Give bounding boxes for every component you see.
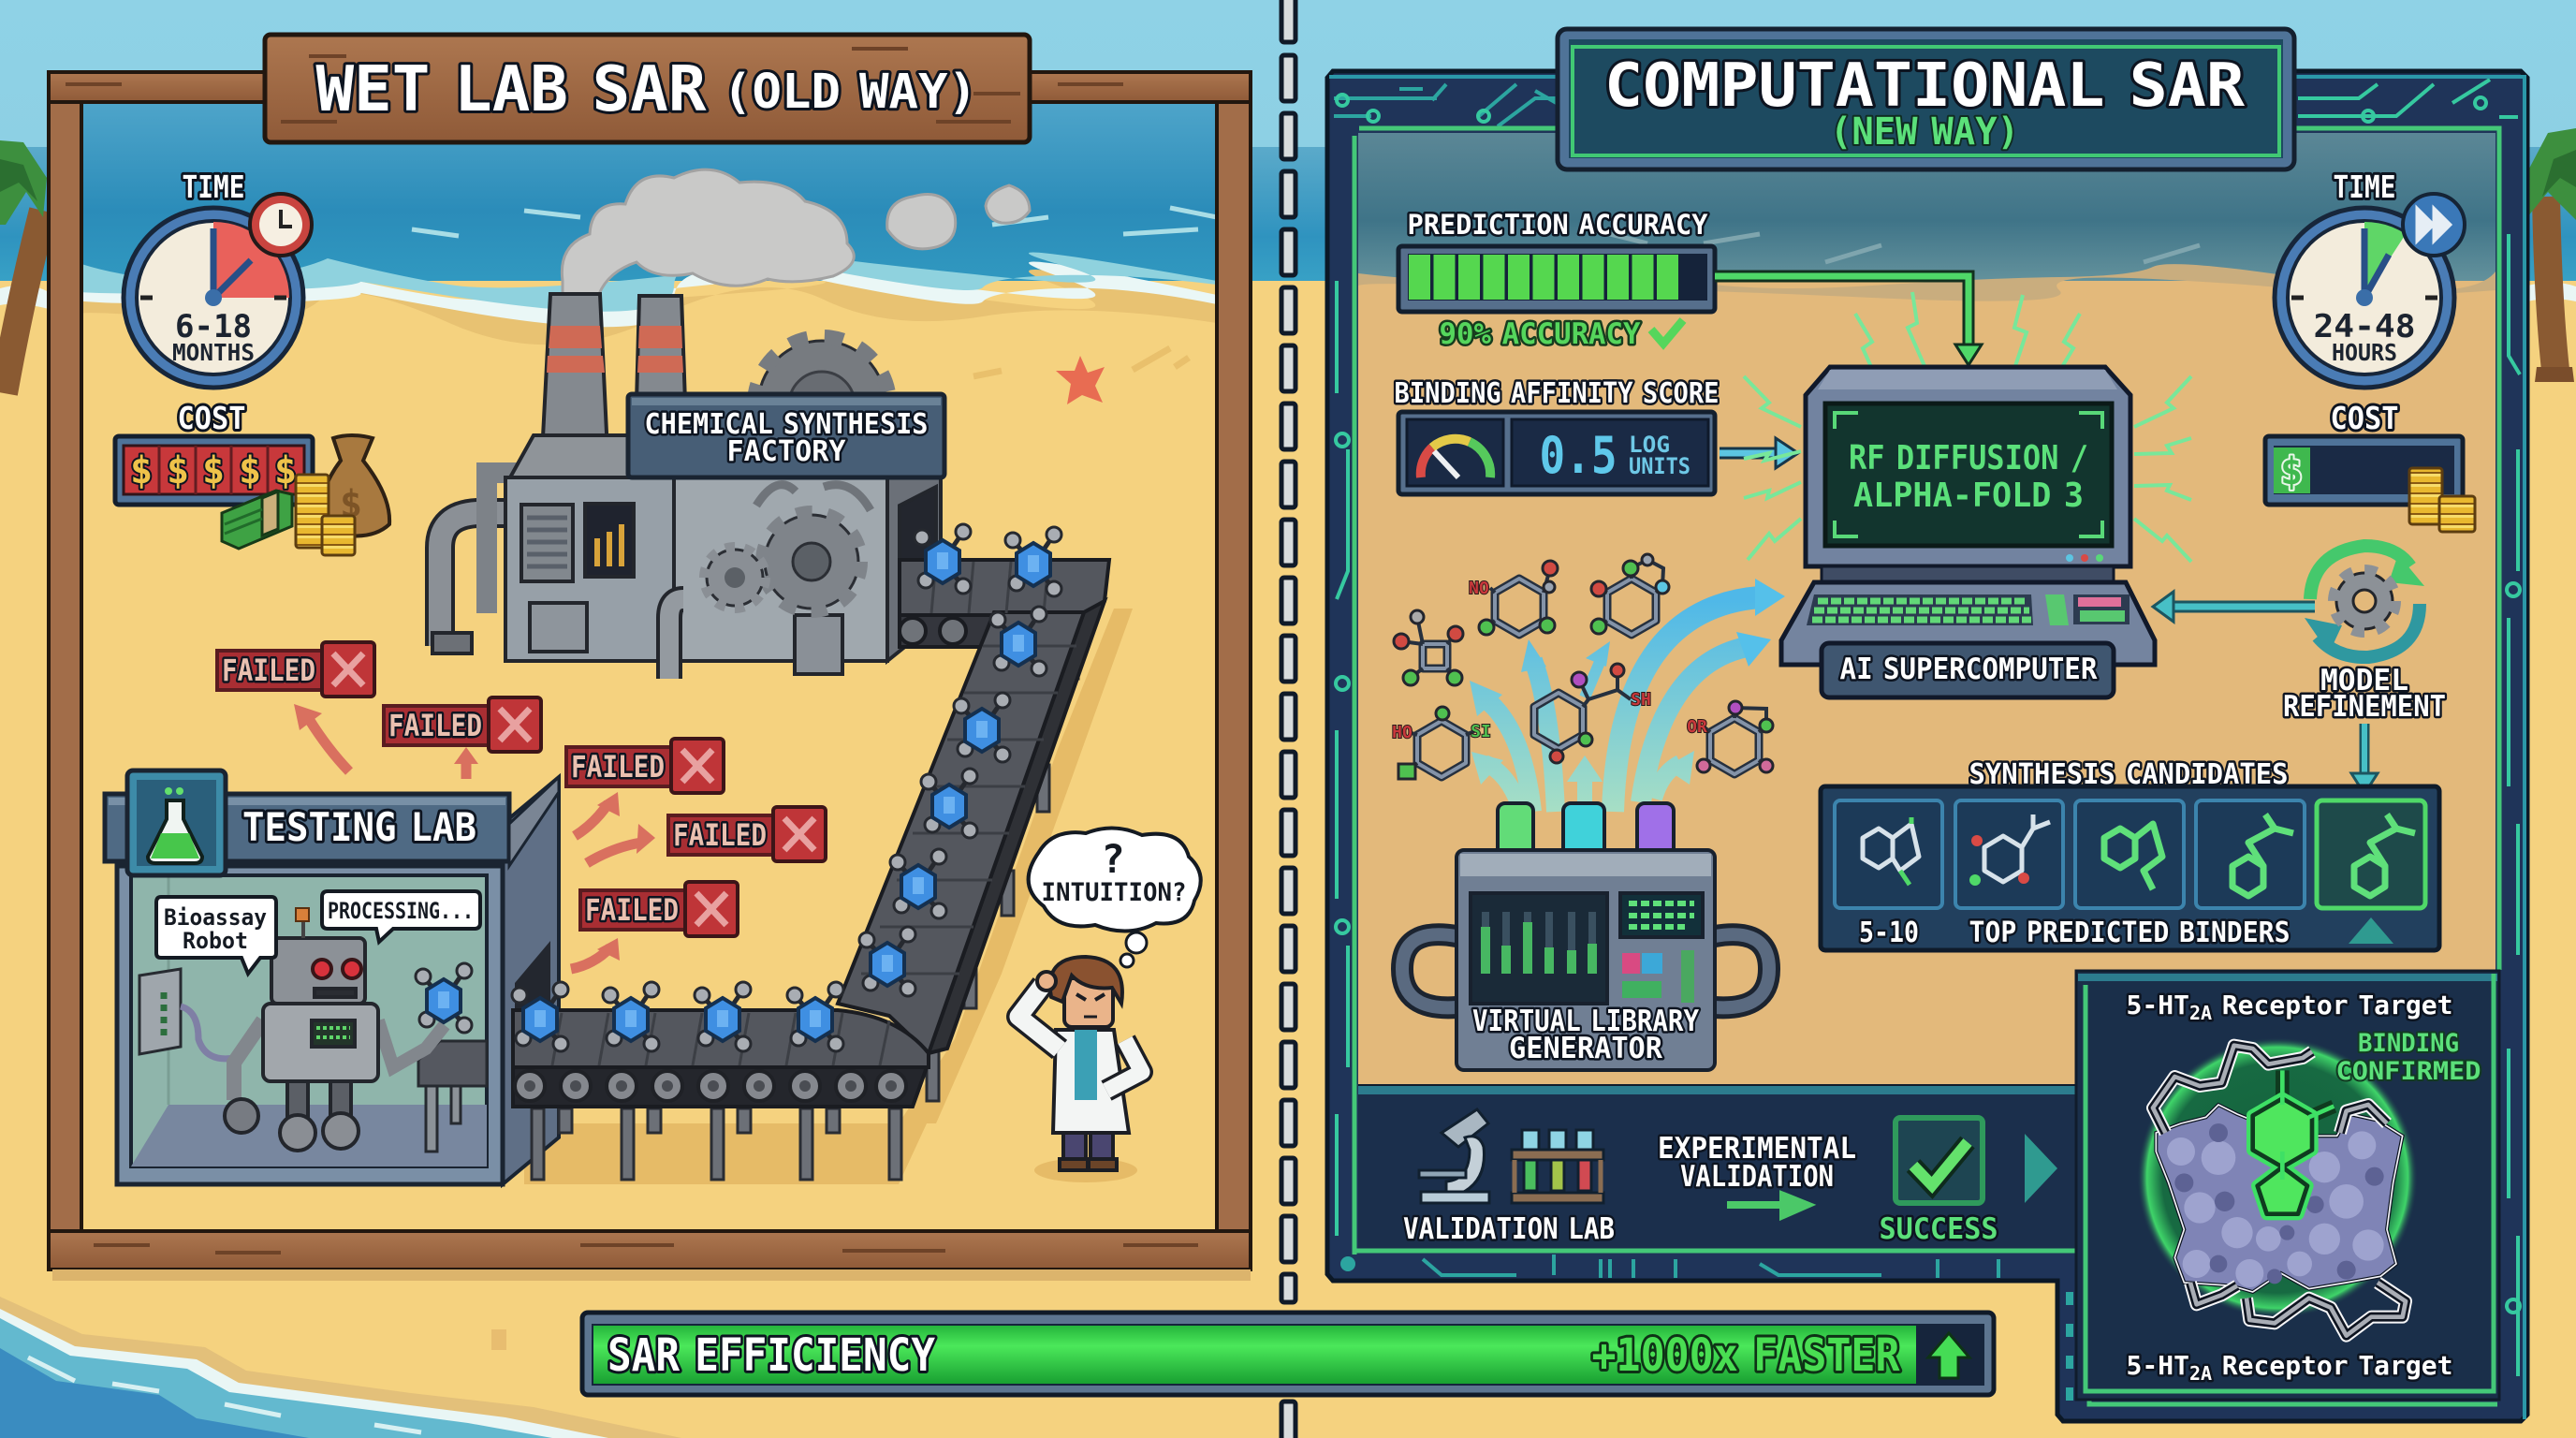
failed test arrows <box>309 719 641 969</box>
progress bar: sar efficiency <box>582 1313 1994 1395</box>
icon: microscope <box>1419 1109 1489 1203</box>
ribbons <box>2153 1046 2406 1336</box>
panel: synthesis candidates: SYNTHESIS CANDIDATES <box>1969 758 2288 791</box>
label: testing lab sign: TESTING LAB <box>242 804 476 850</box>
binding affinity meter <box>1395 377 1719 494</box>
label: chemical synthesis factory: FACTORY <box>726 435 846 468</box>
icon: virtual library generator <box>1402 803 1769 1070</box>
thought bubble: intuition: INTUITION? <box>1041 878 1187 907</box>
icon: green flask <box>148 787 202 863</box>
protein group <box>2153 1046 2406 1336</box>
clock: time 6-18 months: 6-18 <box>175 308 252 345</box>
panel: experimental validation bar: SUCCESS <box>1880 1212 1998 1246</box>
arrows: virtual library to computer <box>1470 579 1785 812</box>
label: ai supercomputer: AI SUPERCOMPUTER <box>1840 653 2098 686</box>
heading: wet lab sar (old way): (OLD WAY) <box>723 65 977 120</box>
arrow: validation <box>1727 1196 1807 1215</box>
icon: candidate molecules <box>1863 814 2415 896</box>
icon: starfish <box>1056 356 1105 404</box>
panel: receptor target: Receptor Target <box>2212 1350 2452 1381</box>
panel: receptor target: 5-HT <box>2127 1350 2189 1381</box>
icon: factory chimneys <box>541 294 685 487</box>
conveyor belt <box>513 560 1109 1180</box>
panel: synthesis candidates: TOP PREDICTED BINDERS <box>1969 917 2290 949</box>
floating skeletal molecules: NO <box>1469 579 1489 598</box>
panel: receptor target: 5-HT <box>2127 990 2189 1020</box>
icon: cash stack <box>222 491 292 549</box>
tag: failed 2: FAILED <box>388 708 482 743</box>
accuracy meter <box>1398 209 1715 351</box>
factory building <box>432 435 941 674</box>
panel: synthesis candidates: 5-10 <box>1859 917 1919 949</box>
panel interior: tinted beach <box>1358 133 2496 1095</box>
label: testing lab sign <box>105 770 559 875</box>
speech bubble: processing <box>322 891 480 942</box>
molecules on conveyor <box>512 524 1061 1051</box>
icon: virtual library generator: VIRTUAL LIBRARY <box>1472 1005 1699 1038</box>
cost meter: new way: $ <box>2280 450 2303 493</box>
cost meter: old way: $ <box>202 449 225 492</box>
arrow: binding affinity to computer <box>1720 438 1798 468</box>
legs <box>532 637 1078 1180</box>
floating skeletal molecules: SI <box>1471 722 1491 741</box>
rollers <box>515 1071 906 1101</box>
speech bubble: bioassay robot <box>156 897 276 974</box>
heading: wet lab sar (old way) <box>265 35 1030 142</box>
icon: coin stacks <box>2409 468 2475 532</box>
smoke clouds <box>562 169 1030 294</box>
icon: wall outlet <box>139 969 234 1059</box>
icon: success check <box>1895 1118 1983 1203</box>
heading: computational sar (new way): (NEW WAY) <box>1830 110 2019 154</box>
arrow: refinement to computer <box>2153 592 2315 622</box>
table <box>418 1041 487 1152</box>
icon: money bag <box>323 435 389 536</box>
icon: ai supercomputer: ALPHA-FOLD 3 <box>1853 477 2084 515</box>
panel: experimental validation bar: VALIDATION <box>1680 1160 1834 1194</box>
icon: right palm tree <box>2527 128 2576 382</box>
accuracy meter: 90% ACCURACY <box>1440 317 1641 351</box>
icon: confused scientist <box>1018 957 1142 1182</box>
binding affinity meter: BINDING AFFINITY SCORE <box>1395 377 1719 410</box>
label: ai supercomputer <box>1822 643 2114 697</box>
icon: bioassay robot <box>225 908 445 1151</box>
floating skeletal molecules: OR <box>1687 717 1707 737</box>
accuracy meter: PREDICTION ACCURACY <box>1408 209 1708 241</box>
tag: failed 1: FAILED <box>222 653 315 688</box>
testing lab room <box>105 770 559 1184</box>
clock: time 6-18 months: MONTHS <box>172 339 255 366</box>
panel: receptor target: 2A <box>2189 1002 2212 1024</box>
upper belt section <box>513 560 1109 1107</box>
icon: gauge <box>1421 439 1490 477</box>
label: model refinement <box>2283 664 2446 724</box>
panel: experimental validation bar: VALIDATION LAB <box>1403 1212 1615 1246</box>
cost meter: old way: $ <box>274 449 297 492</box>
wood frame <box>49 72 1251 1269</box>
cost meter: new way <box>2265 400 2475 532</box>
icon: virtual library generator: GENERATOR <box>1509 1032 1662 1065</box>
panel: computational sar (new way) <box>1327 29 2527 1421</box>
beach interior of wood frame <box>59 100 1217 1232</box>
clock: time 24-48 hours: TIME <box>2333 169 2396 205</box>
panel: receptor target: 2A <box>2189 1362 2212 1385</box>
clock: time 24-48 hours: 24-48 <box>2314 308 2415 345</box>
cost meter: new way: COST <box>2331 400 2398 436</box>
icon: left palm tree <box>0 140 47 393</box>
floating skeletal molecules: HO <box>1392 723 1412 742</box>
icon: model refinement cycle <box>2305 546 2424 657</box>
circuit traces <box>1334 80 2520 1376</box>
tag: failed 5 <box>580 882 738 936</box>
clock: time 24-48 hours: HOURS <box>2332 339 2397 366</box>
arrow: accuracy to computer <box>1715 276 1982 365</box>
circuit frame outer <box>1327 71 2527 1421</box>
icon: coin stacks <box>296 475 355 555</box>
panel: synthesis candidates <box>1821 758 2439 950</box>
icon: fast-forward badge <box>2403 194 2465 256</box>
speech bubble: processing: PROCESSING... <box>328 898 474 924</box>
speech bubble: bioassay robot: Robot <box>183 928 248 954</box>
icon: ai supercomputer <box>1781 367 2155 697</box>
tag: failed 1 <box>217 642 374 697</box>
tag: failed 4: FAILED <box>673 817 767 853</box>
icon: conveyor shadow on sand <box>524 609 1133 1184</box>
center dashed divider <box>1281 0 1295 1438</box>
panel: receptor target: Receptor Target <box>2212 990 2452 1020</box>
icon: up arrow <box>1928 1333 1969 1378</box>
floating skeletal molecules <box>1392 554 1773 779</box>
arrow: refinement to candidates <box>2351 724 2378 794</box>
label: chemical synthesis factory <box>628 394 944 477</box>
cost meter: old way: $ <box>130 449 153 492</box>
heading: computational sar (new way): COMPUTATIONAL SAR <box>1604 51 2245 121</box>
energy bolts around computer <box>1744 292 2191 562</box>
cost meter: old way: $ <box>167 449 189 492</box>
heading: wet lab sar (old way): WET LAB SAR <box>316 52 707 125</box>
thought bubble: intuition: ? <box>1101 836 1125 882</box>
panel: receptor target <box>2070 971 2499 1404</box>
cost meter: old way: $ <box>239 449 261 492</box>
binding affinity meter: UNITS <box>1629 453 1690 479</box>
tag: failed 3: FAILED <box>571 749 665 785</box>
cost meter: old way <box>115 400 389 555</box>
tag: failed 5: FAILED <box>585 892 679 928</box>
tag: failed 4 <box>668 807 826 861</box>
icon: factory gears <box>669 485 871 679</box>
icon: red clock badge <box>250 194 312 256</box>
panel: experimental validation bar <box>1340 1084 2497 1404</box>
cost meter: old way: COST <box>178 400 245 436</box>
progress bar: sar efficiency: SAR EFFICIENCY <box>607 1329 935 1382</box>
binding affinity meter: LOG <box>1629 432 1670 458</box>
icon: molecule held by robot <box>416 963 472 1033</box>
tag: failed 2 <box>384 697 541 752</box>
ligand <box>2253 1070 2334 1214</box>
label: model refinement: REFINEMENT <box>2283 690 2446 724</box>
binding affinity meter: 0.5 <box>1539 426 1617 485</box>
icon: factory gear back <box>754 337 889 472</box>
tag: failed 3 <box>566 739 724 793</box>
speech bubble: bioassay robot: Bioassay <box>164 904 267 931</box>
panel: wet lab (old way) <box>49 35 1251 1281</box>
panel: receptor target: CONFIRMED <box>2336 1057 2481 1086</box>
floating skeletal molecules: SH <box>1631 690 1651 710</box>
clock: time 24-48 hours <box>2275 169 2465 388</box>
progress bar: sar efficiency: +1000x FASTER <box>1591 1329 1900 1382</box>
label: chemical synthesis factory: CHEMICAL SYNTHESIS <box>644 408 929 441</box>
icon: test tube rack <box>1512 1130 1603 1203</box>
label: model refinement: MODEL <box>2320 664 2408 697</box>
heading: computational sar (new way) <box>1558 29 2294 169</box>
arrow: chevron <box>2025 1134 2057 1203</box>
panel: experimental validation bar: EXPERIMENTAL <box>1658 1132 1856 1166</box>
icon: money bag: $ <box>340 483 362 526</box>
thought bubble: intuition <box>1029 828 1201 967</box>
icon: ai supercomputer: RF DIFFUSION / <box>1849 439 2088 477</box>
bottom-left ocean corner <box>0 1297 681 1438</box>
icon: check mark <box>1651 320 1683 344</box>
panel: receptor target: BINDING <box>2358 1029 2459 1058</box>
clock: time 6-18 months: TIME <box>182 169 245 205</box>
clock: time 6-18 months <box>124 169 312 388</box>
